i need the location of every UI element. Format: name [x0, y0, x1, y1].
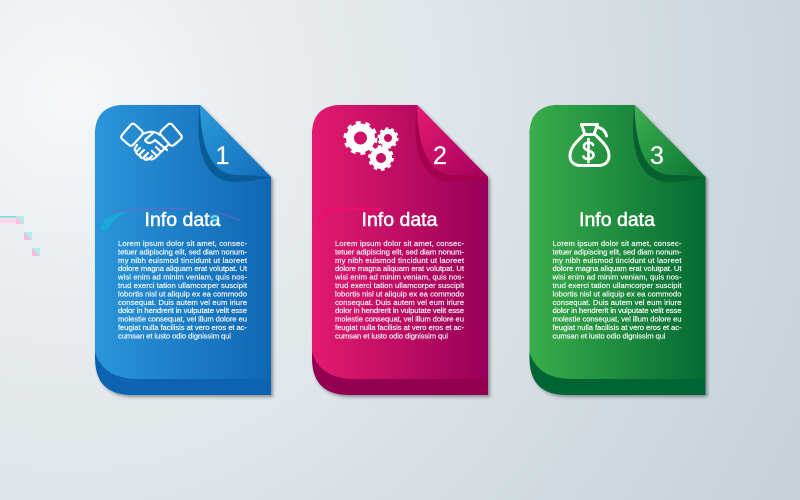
card 1 body text: lobortis nisl ut aliquip ex ea commodo [118, 289, 247, 298]
card 2 body text: tetuer adipiscing elit, sed diam nonum- [335, 247, 464, 256]
card 3 heading: Info data [579, 209, 655, 231]
card 3 body text: Lorem ipsum dolor sit amet, consec- [552, 239, 682, 248]
card 2 fold shadow [415, 105, 488, 182]
card 1 fold shadow [198, 105, 271, 182]
card 1 artifact arc [100, 208, 240, 230]
card 3 body text: wisi enim ad minim veniam, quis nos- [552, 273, 682, 282]
card 3 number: 3 [650, 142, 664, 170]
card 1 body text: Lorem ipsum dolor sit amet, consec- [118, 239, 247, 248]
card 1 body text: molestie consequat, vel illum dolore eu [118, 315, 247, 324]
icon: money bag [570, 124, 609, 166]
card 2 body text: lobortis nisl ut aliquip ex ea commodo [335, 289, 464, 298]
card 1 body text: dolore magna aliquam erat volutpat. Ut [118, 264, 248, 273]
card 1 body text: cumsan et iusto odio dignissim qui [118, 331, 231, 340]
card 2 front face [312, 105, 488, 379]
card 3 front face [530, 105, 706, 379]
card 3 body text: cumsan et iusto odio dignissim qui [552, 331, 666, 340]
card 2 body text: Lorem ipsum dolor sit amet, consec- [335, 239, 464, 248]
card 2 heading: Info data [362, 209, 438, 231]
card 1 body text: wisi enim ad minim veniam, quis nos- [117, 273, 247, 282]
card 3 body text: feugiat nulla facilisis at vero eros et ac- [552, 323, 682, 332]
card 3 back layer [530, 105, 706, 395]
card 3 body text: my nibh euismod tincidunt ut laoreet [552, 256, 682, 265]
card 1 front face [95, 105, 271, 379]
card 3 body text: molestie consequat, vel illum dolore eu [552, 315, 682, 324]
card 3 body text: tetuer adipiscing elit, sed diam nonum- [552, 247, 682, 256]
card 3 body text: lobortis nisl ut aliquip ex ea commodo [552, 289, 682, 298]
card 1 body text: dolor in hendrerit in vulputate velit esse [118, 306, 247, 315]
card 1 body text: consequat. Duis autem vel eum iriure [118, 298, 247, 307]
card 3 body text: consequat. Duis autem vel eum iriure [552, 298, 682, 307]
card 3 fold flap [634, 105, 706, 177]
card 1 heading: Info data [145, 209, 221, 231]
panel: card 1 blue [95, 105, 271, 395]
card 1 body text: trud exerci tation ullamcorper suscipit [118, 281, 248, 290]
card 2 body text: feugiat nulla facilisis at vero eros et ac- [335, 323, 464, 332]
card 2 body text: cumsan et iusto odio dignissim qui [335, 331, 448, 340]
card 3 body text: dolore magna aliquam erat volutpat. Ut [552, 264, 682, 273]
card 1 body text: tetuer adipiscing elit, sed diam nonum- [118, 247, 247, 256]
card 2 body text: consequat. Duis autem vel eum iriure [335, 298, 464, 307]
card 1 body text: feugiat nulla facilisis at vero eros et ac- [118, 323, 247, 332]
decorative artifact marks [0, 216, 40, 256]
card 1 fold flap [200, 105, 271, 177]
card 2 number: 2 [433, 142, 447, 170]
card 3 body text: trud exerci tation ullamcorper suscipit [552, 281, 682, 290]
card 2 fold flap [417, 105, 488, 177]
card 1 back layer [95, 105, 271, 395]
card 2 body text: dolor in hendrerit in vulputate velit esse [335, 306, 464, 315]
card 2 artifact arc [318, 209, 382, 225]
icon: gears [346, 123, 397, 169]
card 2 body text: my nibh euismod tincidunt ut laoreet [335, 256, 465, 265]
icon: handshake [121, 124, 182, 160]
card 2 back layer [312, 105, 488, 395]
card 3 body text: dolor in hendrerit in vulputate velit esse [552, 306, 682, 315]
card 1 number: 1 [216, 142, 229, 170]
card 1 body text: my nibh euismod tincidunt ut laoreet [118, 256, 248, 265]
panel: card 3 green [530, 105, 706, 395]
card 2 body text: molestie consequat, vel illum dolore eu [335, 315, 464, 324]
card 2 body text: dolore magna aliquam erat volutpat. Ut [335, 264, 465, 273]
card 3 fold shadow [633, 105, 706, 182]
card 2 body text: wisi enim ad minim veniam, quis nos- [334, 273, 464, 282]
panel: card 2 magenta [312, 105, 488, 395]
card 2 body text: trud exerci tation ullamcorper suscipit [335, 281, 465, 290]
